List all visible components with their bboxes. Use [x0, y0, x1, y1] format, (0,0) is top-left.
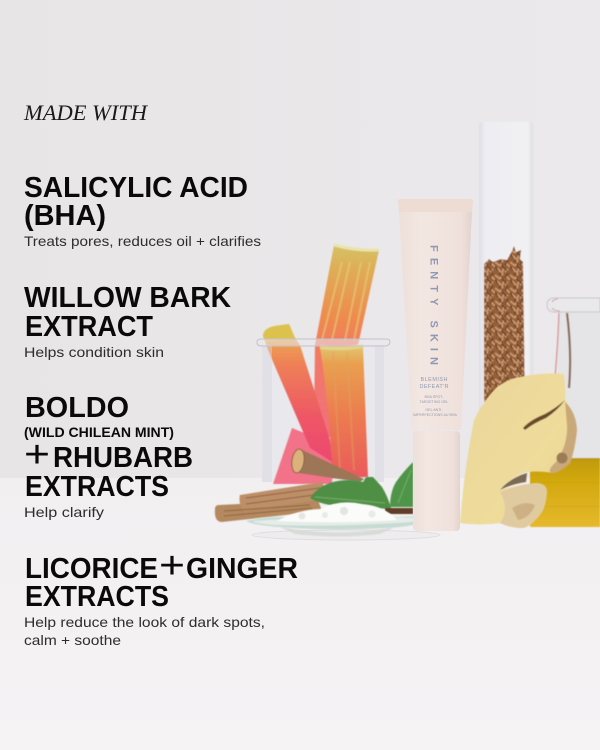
ingredient: willow bark: EXTRACT — [25, 311, 153, 343]
table surface — [0, 478, 600, 750]
label: made with: MADE WITH — [23, 100, 148, 125]
product: fenty skin tube — [398, 199, 473, 531]
ingredient: boldo and rhubarb: BOLDO — [25, 392, 129, 424]
ingredient: licorice and ginger: Help reduce the look of dark spots, — [24, 614, 265, 630]
product small print: IMPERFECTIONS AU BHA — [413, 413, 457, 417]
ingredient: salicylic acid: SALICYLIC ACID — [24, 172, 248, 204]
ingredient: salicylic acid: (BHA) — [24, 200, 106, 232]
ingredient: salicylic acid — [24, 172, 261, 249]
ginger slice — [460, 373, 577, 528]
ingredient: boldo and rhubarb: (WILD CHILEAN MINT) — [24, 425, 174, 440]
glass beaker — [257, 339, 390, 482]
ingredient: licorice and ginger: LICORICE — [25, 553, 158, 585]
ingredient: boldo and rhubarb: RHUBARB — [53, 442, 193, 474]
ingredient: licorice and ginger: EXTRACTS — [25, 581, 169, 613]
beaker with oil — [530, 298, 600, 527]
ginger crack — [523, 400, 565, 430]
ingredient: willow bark — [24, 282, 231, 360]
ingredient: boldo and rhubarb: Help clarify — [24, 504, 104, 520]
product small print: DEFEAT'R — [420, 384, 449, 390]
product small print: TARGETING GEL — [420, 400, 448, 404]
ingredient: licorice and ginger: GINGER — [186, 553, 298, 585]
licorice sticks — [215, 448, 364, 522]
tube cap — [413, 431, 460, 531]
ingredient: boldo and rhubarb — [24, 392, 193, 520]
rhubarb in beaker — [263, 245, 379, 484]
willow bark — [484, 246, 525, 402]
left stalk — [263, 324, 332, 462]
ingredient: boldo and rhubarb: EXTRACTS — [25, 471, 169, 503]
product small print: GEL ANTI- — [425, 408, 443, 412]
product small print — [413, 377, 457, 417]
dish shadow — [252, 530, 440, 540]
ginger skin right — [550, 402, 577, 473]
back stalk — [314, 245, 379, 440]
ingredient: licorice and ginger: + — [159, 545, 185, 587]
glass dish with powder — [246, 502, 433, 536]
olive oil — [530, 458, 600, 527]
glass test tube with willow bark — [479, 122, 533, 420]
ingredient: salicylic acid: Treats pores, reduces oil + clarifies — [24, 233, 261, 249]
product small print: BHA SPOT- — [425, 395, 444, 399]
ingredient: willow bark: WILLOW BARK — [24, 282, 231, 314]
mint leaves — [310, 462, 413, 514]
product small print: BLEMISH — [420, 377, 448, 383]
glass beaker back — [262, 345, 384, 482]
ingredient: boldo and rhubarb: + — [24, 434, 50, 476]
ginger gap — [500, 473, 527, 490]
tube body — [399, 212, 472, 430]
ginger lower knob — [500, 483, 547, 528]
ingredient: willow bark: Helps condition skin — [24, 344, 164, 360]
ingredient: licorice and ginger — [24, 545, 298, 648]
diagonal root — [299, 449, 364, 482]
brand name: FENTY SKIN — [428, 245, 440, 365]
right stalk — [320, 346, 368, 478]
background wall — [0, 0, 600, 478]
ingredient: licorice and ginger: calm + soothe — [24, 632, 121, 648]
tube crimp — [398, 199, 473, 212]
lower crossing stalk — [273, 428, 334, 484]
